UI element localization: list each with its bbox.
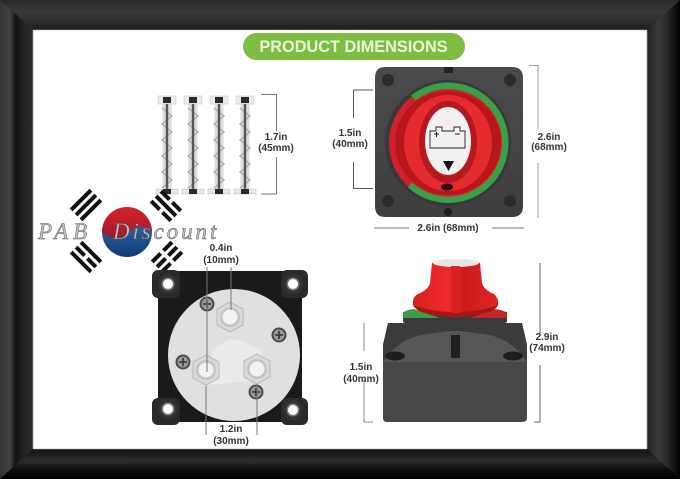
trigram bottom right	[151, 241, 183, 273]
watermark text: PAB	[37, 219, 92, 244]
white panel	[33, 30, 647, 449]
logo watermark	[37, 189, 219, 273]
front view of switch	[383, 259, 527, 422]
front view total height dimension	[529, 263, 565, 422]
top view height left dimension: (40mm)	[332, 139, 368, 150]
taegeuk circle	[102, 207, 152, 257]
watermark text	[37, 219, 219, 244]
bottom view of switch	[152, 270, 308, 425]
watermark text: Discount	[112, 219, 219, 244]
terminal diameter dimension: 0.4in	[210, 243, 232, 254]
battery label	[425, 107, 471, 175]
front view base height dimension: 1.5in	[350, 362, 372, 373]
trigram top left	[70, 189, 102, 221]
terminal spacing dimension: 1.2in	[220, 424, 242, 435]
terminal spacing dimension	[206, 385, 257, 447]
terminal spacing dimension: (30mm)	[213, 436, 249, 447]
front view base height dimension: (40mm)	[343, 374, 379, 385]
top view width dimension: 2.6in (68mm)	[417, 223, 479, 234]
front view total height dimension: (74mm)	[529, 343, 565, 354]
top view height right dimension	[529, 66, 567, 218]
mounting bolts	[156, 96, 256, 194]
red knob	[413, 260, 498, 317]
trigram top right	[150, 190, 182, 222]
bolt dimension: 1.7in	[265, 132, 287, 143]
bolt dimension: (45mm)	[258, 143, 294, 154]
top view height right dimension: 2.6in	[538, 132, 560, 143]
top view of switch	[375, 67, 523, 217]
front view total height dimension: 2.9in	[536, 332, 558, 343]
title pill	[243, 33, 465, 60]
top view height right dimension: (68mm)	[531, 142, 567, 153]
top view height left dimension	[332, 90, 373, 188]
top view height left dimension: 1.5in	[339, 128, 361, 139]
terminal diameter dimension	[203, 243, 239, 372]
trigram bottom left	[70, 241, 102, 273]
terminal diameter dimension: (10mm)	[203, 255, 239, 266]
bolt dimension	[258, 94, 294, 194]
front view base height dimension	[343, 323, 379, 422]
title pill: PRODUCT DIMENSIONS	[259, 38, 448, 56]
